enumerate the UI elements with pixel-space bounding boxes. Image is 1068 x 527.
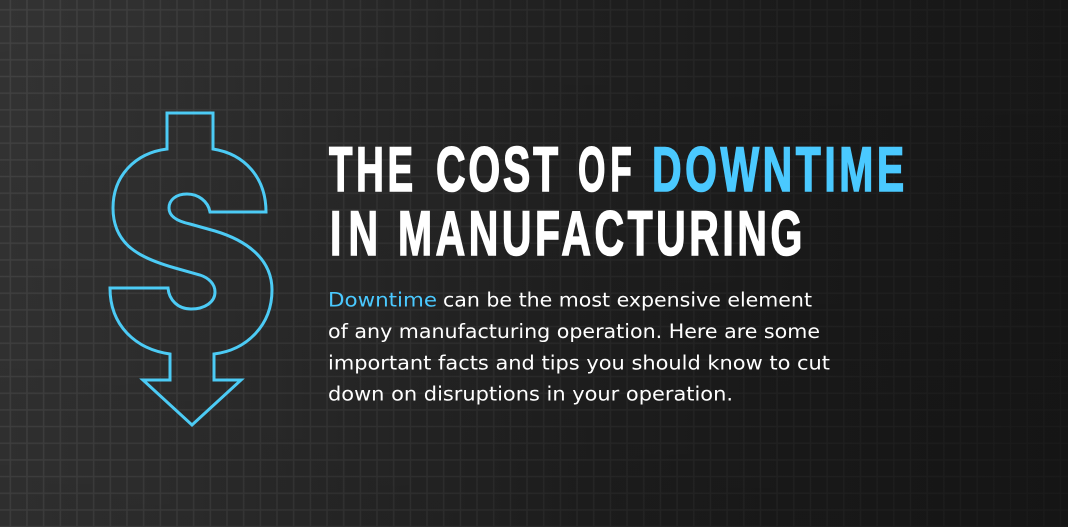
title: MANUFACTURING	[398, 199, 802, 269]
intro paragraph: Downtime	[328, 288, 437, 312]
intro paragraph: down on disruptions in your operation.	[328, 382, 733, 406]
title	[329, 134, 904, 269]
title: DOWNTIME	[652, 135, 904, 205]
intro paragraph: can be the most expensive element	[443, 288, 812, 312]
title: OF	[578, 134, 632, 205]
title: COST	[436, 135, 558, 205]
title: THE	[329, 136, 413, 206]
intro paragraph: important facts and tips you should know to cut	[328, 352, 830, 374]
intro paragraph	[328, 288, 830, 406]
intro paragraph: of any manufacturing operation. Here are some	[328, 320, 820, 343]
title: IN	[330, 199, 378, 269]
icon: dollar sign with down arrow	[110, 113, 272, 425]
